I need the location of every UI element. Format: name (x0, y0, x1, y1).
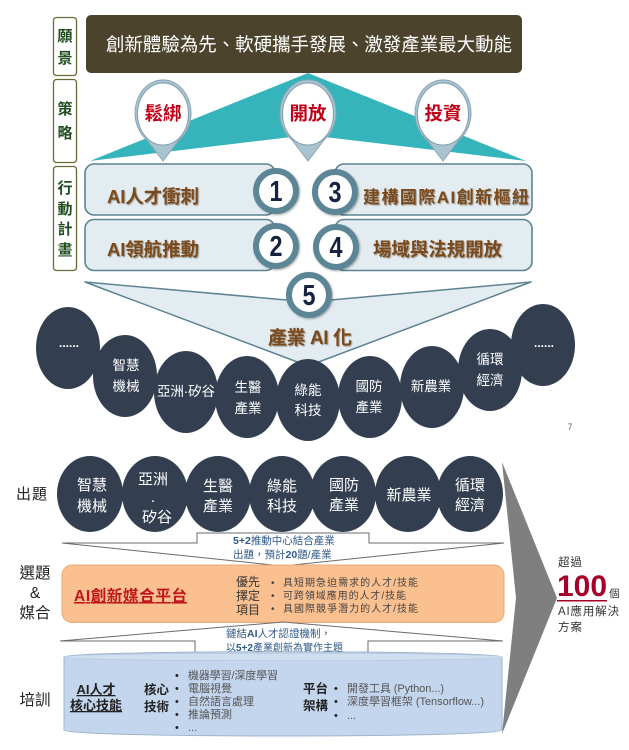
upper oval labels: 循環 (476, 352, 504, 367)
oval: green energy (276, 359, 340, 441)
vision banner (86, 15, 522, 73)
upper oval labels: 綠能 (294, 383, 322, 398)
core technology list: • (175, 683, 179, 695)
side label: action plan: 動 (57, 201, 73, 218)
circle: green energy (249, 456, 315, 532)
core technology list: • (175, 670, 179, 682)
pin: deregulation (135, 80, 191, 161)
badge 2: 2 (270, 231, 282, 263)
side label: strategy: 策 (57, 100, 73, 118)
row label: selection and matching: 選題 (19, 564, 51, 582)
oval: smart machinery (93, 335, 157, 417)
upper oval labels: 國防 (356, 379, 382, 394)
upper industry ovals (36, 304, 575, 441)
platform label: 架構 (303, 698, 329, 713)
platform list: 深度學習框架 (Tensorflow...) (347, 694, 484, 708)
circle: circular economy (437, 456, 503, 532)
panel: matching platform (62, 565, 504, 622)
platform label (303, 681, 329, 713)
row label: training: 培訓 (19, 691, 51, 709)
callout: topic setting (62, 533, 504, 566)
lower circle labels: 矽谷 (142, 509, 172, 526)
badge 3: 3 (328, 177, 342, 209)
lower circle labels: 科技 (267, 498, 297, 515)
badge 3 (315, 172, 355, 212)
priority bullets: • (271, 578, 275, 589)
platform list: • (334, 710, 338, 722)
pin: invest (415, 80, 471, 161)
core technology list: 推論預測 (188, 707, 232, 721)
lower circle labels: . (151, 489, 155, 506)
upper oval labels: ...... (59, 336, 79, 350)
priority label (236, 574, 260, 617)
priority bullets: • (271, 604, 275, 615)
circle: asia silicon valley (122, 456, 188, 532)
priority label: 項目 (236, 603, 260, 617)
badge 5: 5 (302, 280, 316, 312)
callout: topic setting: 5+2推動中心結合產業 (233, 534, 335, 547)
lower circle labels: 綠能 (267, 478, 297, 495)
action box: field and regulation: 場域與法規開放 (373, 239, 502, 260)
row label: selection and matching: & (30, 585, 41, 602)
upper oval labels: 經濟 (476, 373, 504, 388)
lower circle labels: 機械 (77, 498, 107, 515)
oval: new agriculture (400, 346, 464, 428)
oval: more left (36, 307, 100, 389)
lower circle labels: 產業 (329, 497, 359, 514)
core skills title: 核心技能 (70, 698, 122, 713)
action box: AI pilot (85, 220, 275, 270)
lower circle labels: 循環 (455, 477, 485, 494)
lower circle labels: 國防 (329, 477, 359, 494)
badge 2 (256, 226, 296, 266)
upper oval labels: 科技 (294, 403, 322, 418)
side label: action plan (54, 166, 76, 270)
core skills title (70, 682, 122, 713)
core technology list: • (175, 709, 179, 721)
circle: smart machinery (57, 456, 123, 532)
priority bullets (271, 576, 418, 615)
oval: more right (511, 304, 575, 386)
circle: defense (310, 456, 376, 532)
upper oval labels: 新農業 (411, 379, 451, 394)
upper oval labels: 生醫 (234, 380, 262, 395)
industry AI heading: 產業 AI 化 (268, 326, 352, 349)
upper oval labels: 智慧 (112, 358, 140, 373)
action box: field and regulation (335, 220, 532, 270)
core technology list: 電腦視覺 (188, 681, 232, 695)
callout: certification: 鏈結AI人才認證機制， (226, 627, 331, 640)
priority bullets: • (271, 591, 275, 602)
platform list: 開發工具 (Python...) (347, 681, 444, 695)
side label: action plan: 計 (57, 220, 73, 238)
action box: AI pilot: AI領航推動 (107, 239, 199, 260)
side label: vision: 景 (57, 50, 73, 67)
circle: biomedical (185, 456, 251, 532)
callout: certification (60, 622, 503, 654)
upper oval labels: 產業 (356, 399, 382, 415)
lower circle labels: 智慧 (77, 476, 107, 494)
page number: 7 (567, 422, 573, 432)
oval: defense (338, 356, 402, 438)
upper oval labels (59, 336, 554, 418)
side label: strategy: 略 (57, 124, 73, 142)
outcome callout: 100 (557, 570, 607, 603)
circle: new agriculture (375, 456, 441, 532)
priority bullets: 具國際競爭潛力的人才/技能 (283, 602, 418, 615)
lower circle labels (77, 471, 485, 526)
outcome callout: 方案 (558, 620, 582, 634)
lower circle labels: 產業 (203, 498, 233, 515)
lower circle labels: 亞洲 (138, 471, 168, 488)
platform list (334, 681, 484, 722)
core technology list: • (175, 722, 179, 734)
upper oval labels: 產業 (234, 400, 262, 416)
core technology list: ... (188, 722, 197, 734)
platform list: • (334, 696, 338, 708)
platform title: AI創新媒合平台 (74, 586, 187, 605)
platform list: • (334, 683, 338, 695)
badge 4: 4 (330, 232, 342, 264)
oval: biomedical (215, 356, 279, 438)
upper oval labels: 機械 (112, 379, 140, 394)
row label: topic: 出題 (16, 486, 47, 503)
lower circle labels: 生醫 (203, 478, 233, 495)
big chevron arrow (502, 462, 557, 734)
badge 1 (256, 171, 296, 211)
action box: international hub: 建構國際AI創新樞紐 (363, 187, 529, 207)
core technology list: 自然語言處理 (188, 694, 254, 708)
core technology label: 技術 (144, 699, 170, 714)
row label: selection and matching (19, 564, 51, 622)
lower industry circles (57, 456, 503, 532)
action box: AI talent (85, 164, 275, 215)
upper oval labels: 亞洲·矽谷 (157, 384, 216, 399)
pin: deregulation: 鬆綁 (144, 103, 182, 124)
oval: asia silicon valley (154, 351, 218, 433)
outcome callout: AI應用解決 (558, 604, 620, 618)
pin: open (280, 80, 336, 161)
callout: certification: 以5+2產業創新為實作主題 (226, 641, 343, 654)
badge 4 (316, 227, 356, 267)
funnel (85, 282, 531, 366)
lower circle labels: 新農業 (386, 487, 432, 504)
platform list: ... (347, 710, 356, 722)
platform label: 平台 (303, 681, 328, 696)
callout: topic setting: 出題，預計20題/產業 (233, 548, 332, 561)
action box: AI talent: AI人才衝刺 (107, 186, 199, 207)
upper oval labels: ...... (534, 336, 554, 350)
side label: action plan: 行 (57, 180, 73, 197)
priority label: 擇定 (236, 588, 260, 603)
panel: training cylinder (64, 652, 502, 736)
action box: international hub (335, 164, 532, 215)
oval: circular economy (458, 329, 522, 411)
badge 5 (289, 275, 329, 315)
badge 1: 1 (270, 176, 282, 208)
vision banner: 創新體驗為先、軟硬攜手發展、激發產業最大動能 (106, 34, 512, 55)
core technology label: 核心 (144, 682, 170, 697)
side label: strategy (54, 80, 76, 162)
side label: vision: 願 (57, 28, 73, 45)
pin: invest: 投資 (424, 103, 462, 124)
outcome callout: 個 (609, 587, 620, 600)
outcome callout (557, 555, 620, 634)
lower circle labels: 經濟 (455, 497, 485, 514)
priority bullets: 具短期急迫需求的人才/技能 (283, 576, 418, 589)
core technology list: 機器學習/深度學習 (188, 668, 278, 682)
strategy roof (90, 73, 526, 161)
side label: vision (54, 18, 76, 76)
core technology label (144, 682, 170, 714)
row label: selection and matching: 媒合 (19, 604, 51, 622)
core skills title: AI人才 (76, 682, 116, 697)
core technology list: • (175, 696, 179, 708)
pin: open: 開放 (289, 103, 327, 124)
priority bullets: 可跨領域應用的人才/技能 (283, 589, 406, 602)
side label: action plan: 畫 (57, 242, 73, 259)
priority label: 優先 (236, 574, 260, 589)
outcome callout: 超過 (558, 555, 582, 569)
core technology list (175, 668, 278, 734)
